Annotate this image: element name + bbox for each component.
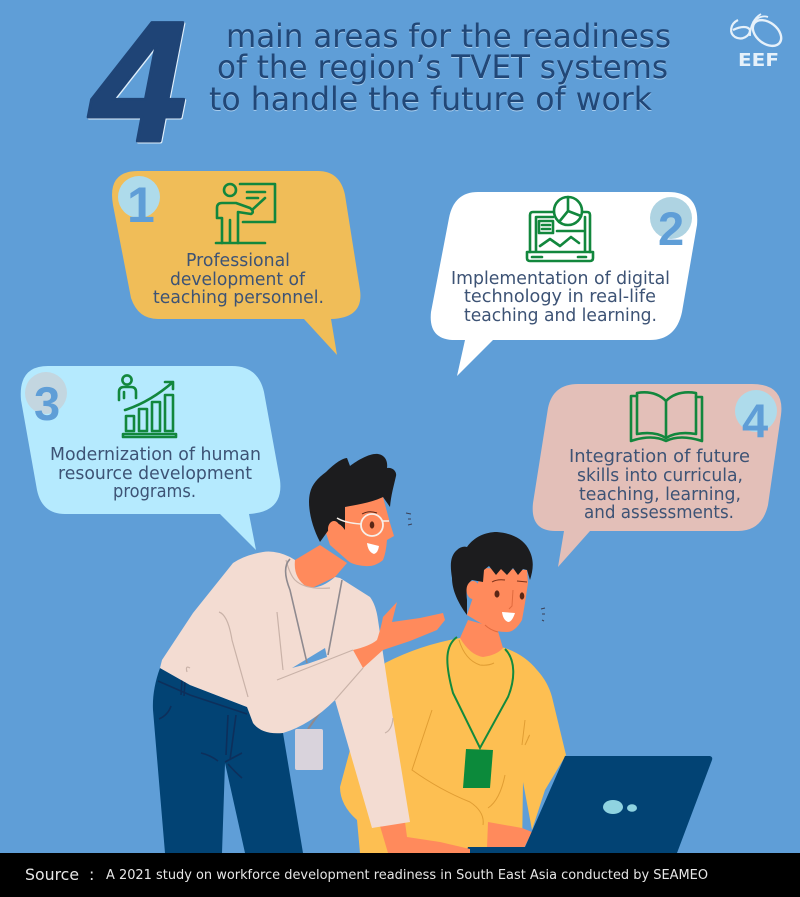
number badge 2: 2	[658, 202, 684, 255]
number badge 4	[735, 390, 777, 447]
teacher trousers	[153, 668, 303, 853]
student hand	[487, 822, 532, 850]
logo: EEF	[731, 14, 786, 71]
number badge 1: 1	[127, 177, 155, 233]
student lanyard	[447, 637, 513, 748]
sweater folds	[412, 640, 529, 825]
number badge 3: 3	[34, 377, 60, 430]
text: digital technology	[451, 268, 670, 326]
laptop logo dots	[603, 800, 637, 814]
panel: bubble 1 professional development	[112, 171, 360, 355]
logo: EEF: EEF	[738, 50, 779, 71]
text: future skills: teaching, learning,	[579, 484, 741, 505]
teacher hand	[353, 602, 445, 668]
teacher ear	[328, 521, 340, 537]
shirt folds	[186, 560, 393, 733]
number badge 2	[650, 197, 692, 255]
text: professional development: teaching personnel.	[153, 287, 324, 308]
text: future skills: Integration of future	[569, 446, 750, 467]
student ear	[466, 581, 480, 599]
teacher lower hand	[380, 822, 470, 853]
teacher forearm	[270, 650, 363, 720]
teacher hair	[309, 454, 396, 542]
teacher neck	[294, 545, 347, 588]
yellow sweater	[340, 638, 566, 853]
illustration: laptop	[466, 756, 712, 853]
ID badge hanging	[295, 712, 323, 770]
number badge 4: 4	[742, 394, 768, 447]
text: professional development: development of	[170, 269, 306, 290]
teacher eye and mouth	[362, 512, 379, 554]
trouser details	[158, 680, 247, 778]
source colon: :	[89, 865, 94, 884]
title	[209, 17, 671, 118]
text: human resources: Modernization of human	[50, 444, 261, 465]
text: future skills	[569, 446, 750, 523]
number badge 1	[118, 176, 160, 233]
icon: open book	[631, 392, 702, 441]
sound marks	[541, 608, 545, 621]
teacher face	[325, 497, 394, 566]
panel: bubble 3 human resources	[21, 366, 280, 550]
icon: laptop with charts	[527, 197, 593, 261]
illustration: teacher with glasses	[153, 454, 470, 853]
icon: person and growth chart	[119, 375, 176, 437]
student eyes and mouth	[485, 580, 527, 632]
text: future skills: and assessments.	[584, 502, 734, 523]
number badge 3	[25, 372, 67, 430]
title: main areas for the readiness	[226, 17, 671, 55]
text: professional development: Professional	[186, 250, 290, 271]
text: future skills: skills into curricula,	[577, 465, 743, 486]
panel: bubble 2 digital technology	[431, 192, 697, 376]
gap between arm and torso	[292, 648, 327, 668]
source label: Source	[25, 865, 79, 884]
text: professional development	[153, 250, 324, 308]
student badge	[463, 749, 493, 788]
text: digital technology: technology in real-life	[464, 286, 656, 307]
teacher glasses	[337, 514, 389, 536]
student hair	[451, 532, 533, 615]
student face	[467, 568, 528, 632]
icon: teacher at board	[216, 184, 275, 243]
text: digital technology: teaching and learning.	[464, 305, 657, 326]
title: to handle the future of work	[209, 80, 652, 118]
text: human resources: resource development	[58, 463, 252, 484]
illustration: student in yellow	[340, 532, 566, 853]
footer band	[0, 853, 800, 897]
panel: bubble 4 future skills	[533, 384, 781, 567]
text: digital technology: Implementation of digital	[451, 268, 670, 289]
title: of the region’s TVET systems	[217, 48, 668, 86]
student neck	[460, 620, 503, 657]
source citation: A 2021 study on workforce development readiness in South East Asia conducted by SEAMEO	[106, 867, 708, 883]
text: human resources: programs.	[113, 481, 196, 502]
teacher lanyard	[286, 559, 342, 663]
text: human resources	[50, 444, 261, 502]
teacher shirt	[160, 552, 410, 828]
sound marks	[406, 513, 412, 525]
